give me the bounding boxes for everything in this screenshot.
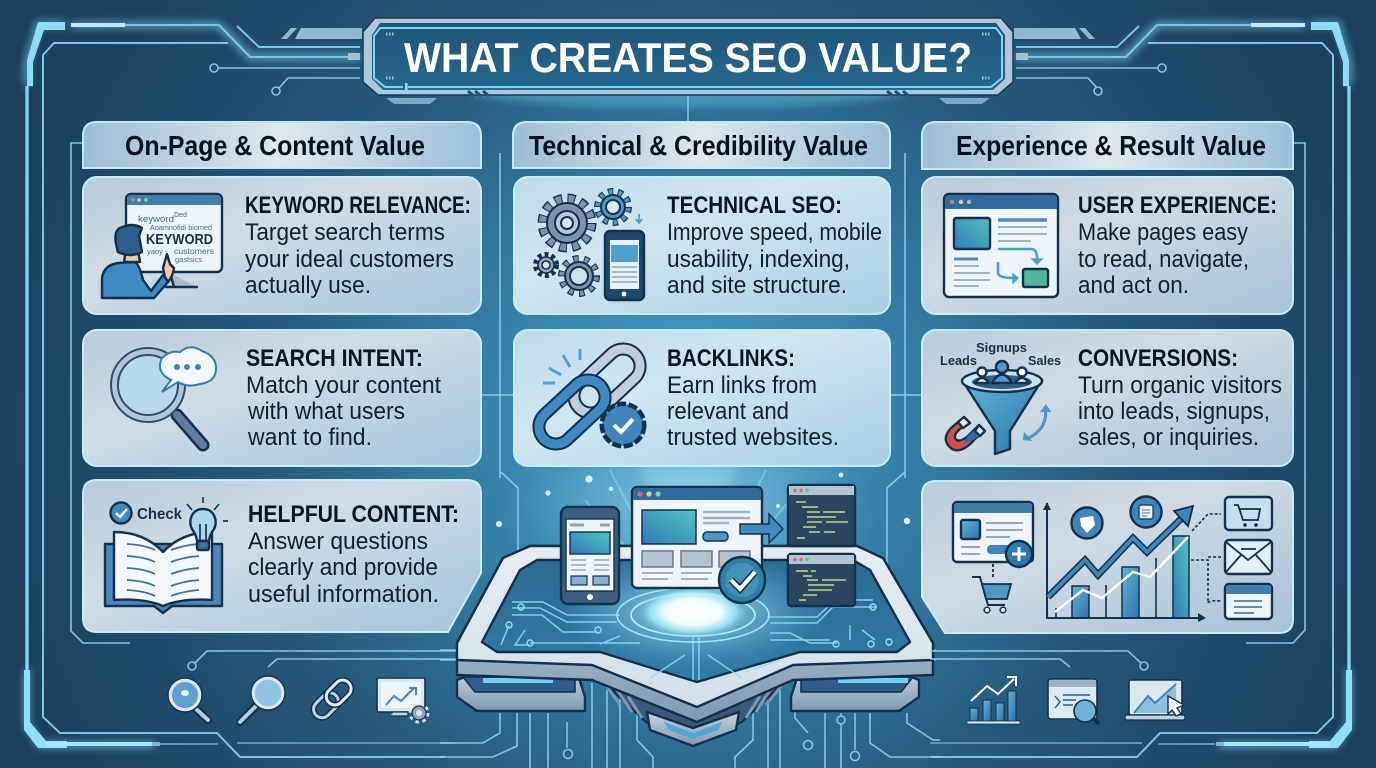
card: user experience: USER EXPERIENCE: [1078, 192, 1277, 219]
icon: conversion funnel with magnet: Sales [1028, 353, 1061, 368]
icon: person at keyword monitor: Ded [174, 212, 187, 219]
platform top surface [457, 546, 933, 722]
footer circuit traces [188, 651, 1148, 670]
card: technical seo [514, 177, 890, 314]
icon: conversion funnel with magnet [940, 340, 1061, 454]
column heading: technical [513, 122, 890, 168]
icon: person at keyword monitor: Aoamnofidi biomed [150, 225, 212, 232]
panel: experience and result value [922, 122, 1293, 633]
card: conversions: sales, or inquiries. [1078, 424, 1259, 451]
panel: on-page and content value [83, 122, 481, 632]
card: backlinks [514, 330, 890, 466]
card: helpful content: clearly and provide [248, 554, 438, 581]
circuit traces beside title [210, 28, 1166, 104]
card: keyword relevance: your ideal customers [245, 246, 454, 273]
card: helpful content: useful information. [248, 581, 439, 608]
icon: footer monitor with gear [377, 678, 427, 721]
card: user experience: and act on. [1078, 272, 1189, 299]
icon: person at keyword monitor [102, 194, 222, 298]
card: user experience: Make pages easy [1078, 219, 1248, 246]
central light beam [496, 400, 910, 620]
icon: page to cart [953, 502, 1033, 613]
icon: footer magnifier one [168, 678, 208, 720]
icon: footer bar chart [967, 677, 1020, 724]
card: search intent: with what users [247, 398, 405, 425]
card: keyword relevance: Target search terms [245, 219, 445, 246]
title text: WHAT CREATES SEO VALUE? [404, 34, 972, 81]
chart: rising trend [1043, 496, 1206, 622]
phone mockup [561, 507, 619, 604]
icon: magnifier with speech bubble [111, 347, 216, 445]
icon: outcome boxes [1191, 497, 1272, 619]
icon: person at keyword monitor: keyword [138, 214, 174, 224]
card: conversions: CONVERSIONS: [1078, 345, 1238, 372]
icon: footer laptop with cursor [1125, 680, 1185, 720]
card: search intent [83, 330, 481, 466]
card: keyword relevance: actually use. [245, 272, 371, 299]
icon: person at keyword monitor: gastsics [175, 255, 202, 264]
platform circuit screen [482, 560, 910, 682]
card: helpful content: Answer questions [248, 528, 428, 555]
icon: person at keyword monitor: KEYWORD [146, 231, 213, 248]
panel: technical and credibility value [513, 122, 890, 466]
column heading: experience: Experience & Result Value [956, 130, 1266, 161]
card: search intent: Match your content [246, 372, 441, 399]
card: helpful content: HELPFUL CONTENT: [248, 501, 459, 528]
code window top [788, 485, 855, 546]
card: backlinks: trusted websites. [667, 424, 839, 451]
icon: person at keyword monitor: yaoy - [147, 247, 168, 256]
card: keyword relevance: KEYWORD RELEVANCE: [245, 192, 471, 219]
check badge [719, 557, 765, 603]
column heading: technical: Technical & Credibility Value [529, 130, 868, 161]
card: keyword relevance [83, 177, 481, 314]
platform side pods [457, 672, 919, 711]
card: results chart [922, 481, 1293, 633]
card: backlinks: BACKLINKS: [667, 345, 795, 372]
card: search intent: SEARCH INTENT: [246, 345, 423, 372]
title plate [363, 18, 1013, 108]
icon: footer chain [310, 677, 355, 721]
card: user experience [922, 177, 1293, 314]
card: technical seo: TECHNICAL SEO: [667, 192, 842, 219]
card: user experience: to read, navigate, [1078, 246, 1249, 273]
icon: conversion funnel with magnet: Signups [976, 340, 1027, 355]
icon: footer magnifier two [240, 676, 285, 722]
icon: footer code window with magnifier [1048, 679, 1099, 724]
column heading: experience [922, 122, 1293, 169]
card: helpful content [83, 480, 481, 632]
icon: person at keyword monitor: customers [174, 246, 214, 256]
code window bottom [788, 554, 855, 606]
main website window [632, 487, 762, 588]
card: conversions [922, 330, 1293, 466]
icon: open book, check and bulb: Check [137, 506, 182, 523]
card: technical seo: and site structure. [667, 272, 847, 299]
icon: gears and phone [536, 192, 644, 300]
icon: open book, check and bulb [105, 497, 228, 613]
icon: website layout flow [944, 194, 1058, 297]
card: technical seo: Improve speed, mobile [667, 219, 882, 246]
icon: chain links with badge [532, 342, 647, 451]
icon: conversion funnel with magnet: Leads [940, 353, 977, 368]
circuit traces under platform [440, 683, 940, 768]
platform underside [596, 675, 792, 746]
card: search intent: want to find. [247, 424, 372, 451]
card: conversions: Turn organic visitors [1078, 372, 1282, 399]
glowing core [558, 550, 828, 670]
arrow: window to code [740, 514, 783, 543]
card: backlinks: relevant and [667, 398, 789, 425]
column heading: on-page [83, 122, 481, 168]
card: conversions: into leads, signups, [1078, 398, 1270, 425]
central platform [440, 485, 940, 768]
card: backlinks: Earn links from [667, 372, 817, 399]
connector lines between panels [71, 95, 1305, 660]
card: technical seo: usability, indexing, [667, 246, 850, 273]
column heading: on-page: On-Page & Content Value [125, 130, 425, 161]
